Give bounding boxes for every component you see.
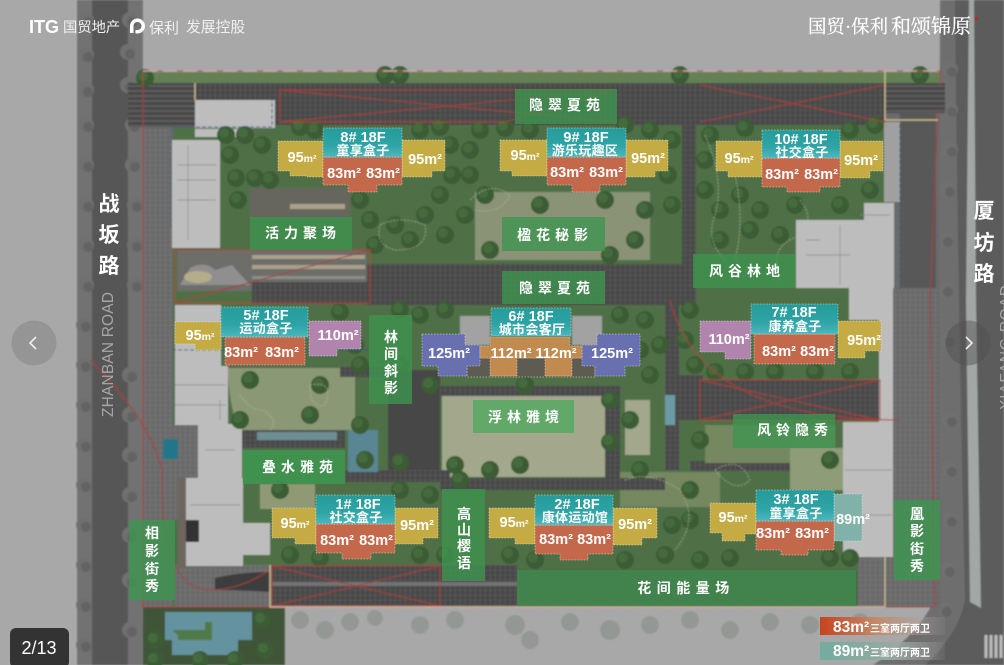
legend: 89m²: 三室两厅两卫	[870, 646, 930, 659]
building 5#: 83m²	[265, 345, 299, 361]
building 6#: 125m²	[591, 346, 633, 362]
legend: 83m²	[820, 617, 945, 636]
white buildings	[172, 100, 900, 566]
building 1#: 83m²	[359, 533, 393, 549]
trees	[136, 66, 929, 665]
building 9#: 83m²	[550, 165, 584, 181]
legend: 89m²	[820, 642, 945, 660]
paving	[195, 83, 885, 125]
zone label: 楹花秘影: 楹花秘影	[517, 227, 593, 243]
building 2#: 83m²	[539, 532, 573, 548]
building 1#: 95m²	[281, 516, 310, 532]
building 9#: 83m²	[589, 165, 623, 181]
zone label: 高山樱语: 高	[457, 506, 471, 522]
building 8#: 童享盒子	[336, 143, 390, 158]
building 3#: 83m²	[795, 526, 829, 542]
building 8#: 8# 18F	[340, 130, 386, 146]
zone label: 活力聚场	[250, 217, 352, 250]
zone label: 相影街秀: 相	[145, 525, 159, 541]
building 7#: 110m²	[708, 332, 750, 348]
building 7#: 7# 18F	[771, 305, 817, 321]
building 2#: 95m²	[618, 517, 652, 533]
zone label: 相影街秀: 秀	[145, 578, 159, 594]
building 9#	[500, 128, 668, 192]
zone label: 凰影街秀: 秀	[910, 558, 924, 574]
building 1#: 95m²	[400, 518, 434, 534]
zone label: 叠水雅苑: 叠水雅苑	[262, 459, 338, 475]
zone label: 高山樱语: 语	[457, 555, 471, 571]
zone label: 隐翠夏苑 north	[515, 89, 617, 124]
building 6#	[422, 308, 640, 377]
zone label: 浮林雅境	[473, 400, 574, 433]
building 9#: 游乐玩趣区	[552, 143, 618, 158]
zone label: 高山樱语: 樱	[457, 538, 471, 554]
building 10#: 社交盒子	[775, 145, 829, 160]
building 5#: 83m²	[224, 345, 258, 361]
building plan lines	[175, 145, 892, 515]
zone label: 相影街秀: 街	[145, 561, 159, 577]
zone label: 风铃隐秀: 风铃隐秀	[757, 422, 833, 438]
zone label: 凰影街秀: 街	[910, 541, 924, 557]
building 10#: 95m²	[844, 153, 878, 169]
red site lines	[90, 71, 940, 607]
building 9#: 95m²	[631, 151, 665, 167]
building 3#: 3# 18F	[773, 492, 819, 508]
project title: 和颂锦原	[891, 15, 971, 38]
zone label: 林间斜影: 间	[384, 346, 398, 362]
building 3#	[710, 490, 870, 555]
building 2#: 95m²	[500, 515, 529, 531]
building 7#: 83m²	[800, 344, 834, 360]
zone label: 高山樱语: 山	[457, 522, 471, 538]
zone label: 林间斜影: 影	[384, 380, 398, 396]
building 10#: 83m²	[765, 167, 799, 183]
building 6#: 112m²	[490, 346, 532, 362]
zone label: 隐翠夏苑 central	[502, 271, 605, 304]
zone label: 隐翠夏苑 north: 隐翠夏苑	[529, 97, 605, 113]
zone label: 凰影街秀	[894, 500, 940, 580]
building 7#: 83m²	[762, 344, 796, 360]
building 8#: 95m²	[408, 152, 442, 168]
building 6#: 125m²	[428, 346, 470, 362]
zone label: 隐翠夏苑 central: 隐翠夏苑	[519, 280, 595, 296]
header logo: ITG 国贸地产	[29, 17, 120, 37]
legend: 83m²: 83m²	[833, 619, 869, 636]
zone label: 高山樱语	[442, 489, 485, 581]
building 10#: 83m²	[804, 167, 838, 183]
lawns	[442, 395, 607, 477]
building 7#: 95m²	[847, 333, 881, 349]
building 1#: 1# 18F	[335, 497, 381, 513]
zone label: 相影街秀	[129, 520, 175, 600]
zone label: 风谷林地: 风谷林地	[709, 263, 785, 279]
legend: 83m²: 三室两厅两卫	[870, 622, 930, 635]
building 10#: 95m²	[725, 151, 754, 167]
building 7#	[700, 304, 881, 364]
garden below site	[143, 607, 285, 665]
header logo: 保利发展控股	[130, 18, 245, 37]
building 6#: 6# 18F	[508, 309, 554, 325]
legend: 89m²: 89m²	[833, 643, 869, 660]
left road	[76, 0, 143, 665]
road name: 战坂路: 战	[98, 193, 120, 216]
building 3#: 童享盒子	[769, 506, 823, 521]
building 5#	[175, 307, 361, 365]
zone label: 楹花秘影	[502, 217, 605, 251]
right road	[873, 0, 1004, 665]
zone label: 叠水雅苑	[243, 450, 345, 484]
slide counter: 2/13	[21, 638, 57, 658]
building 10#: 10# 18F	[774, 132, 828, 148]
building 9#: 9# 18F	[563, 130, 609, 146]
road name: 厦坊路: 厦	[974, 200, 994, 223]
site base	[143, 72, 885, 607]
project title: 国贸·保利	[808, 17, 888, 38]
zone label: 林间斜影	[369, 315, 412, 404]
zone label: 活力聚场: 活力聚场	[265, 225, 341, 241]
road name: 战坂路	[98, 193, 120, 278]
zone label: 凰影街秀: 影	[910, 523, 924, 539]
building 5#: 运动盒子	[239, 321, 293, 336]
header logo: ITG 国贸地产: ITG	[29, 17, 59, 37]
building 2#	[489, 495, 657, 560]
paths around central lawn	[340, 367, 388, 377]
building 10#	[716, 130, 883, 192]
building 8#: 95m²	[288, 150, 317, 166]
building 1#: 社交盒子	[329, 510, 383, 525]
building 6#: 城市会客厅	[499, 322, 565, 337]
building 5#: 95m²	[186, 328, 215, 344]
zone label: 风谷林地	[693, 254, 795, 288]
road name: 厦坊路	[974, 200, 994, 286]
previous arrow button	[12, 320, 56, 366]
building 3#: 95m²	[719, 510, 748, 526]
zone label: 风铃隐秀	[733, 414, 835, 448]
zone label: 林间斜影: 林	[384, 329, 398, 345]
building 6#: 112m²	[535, 346, 577, 362]
zone label: 花间能量场: 花间能量场	[637, 580, 735, 596]
header logo: 保利发展控股: 保利	[149, 20, 179, 37]
zone label: 相影街秀: 影	[145, 543, 159, 559]
road name: 厦坊路: 路	[974, 263, 994, 286]
zone label: 花间能量场	[517, 570, 856, 606]
road name: 战坂路: 路	[98, 255, 120, 278]
header logo: 保利发展控股: 发展控股	[186, 19, 245, 36]
zone label: 林间斜影: 斜	[384, 363, 398, 379]
building 8#: 83m²	[327, 166, 361, 182]
building 5#: 110m²	[317, 328, 359, 344]
road name: ZHANBAN ROAD: ZHANBAN ROAD	[100, 292, 117, 417]
next arrow button	[946, 320, 990, 366]
road name: 厦坊路: 坊	[974, 231, 994, 255]
building 1#: 83m²	[320, 533, 354, 549]
building 1#	[272, 495, 438, 559]
building 2#: 2# 18F	[554, 497, 600, 513]
landscape contour lines	[240, 135, 808, 550]
building 3#: 89m²	[836, 512, 870, 528]
building 9#: 95m²	[511, 148, 540, 164]
building 3#: 83m²	[756, 526, 790, 542]
building 2#: 83m²	[577, 532, 611, 548]
road name: 战坂路: 坂	[98, 224, 120, 247]
zone label: 凰影街秀: 凰	[910, 506, 924, 522]
building 5#: 5# 18F	[243, 308, 289, 324]
header logo: ITG 国贸地产: 国贸地产	[63, 19, 120, 36]
building 7#: 康养盒子	[768, 319, 822, 334]
slide counter	[10, 628, 69, 665]
building 8#	[278, 128, 445, 192]
tree shadows south of site	[291, 610, 869, 649]
zone label: 浮林雅境: 浮林雅境	[488, 409, 564, 425]
building 2#: 康体运动馆	[542, 510, 608, 525]
project title	[808, 15, 978, 38]
building 8#: 83m²	[366, 166, 400, 182]
